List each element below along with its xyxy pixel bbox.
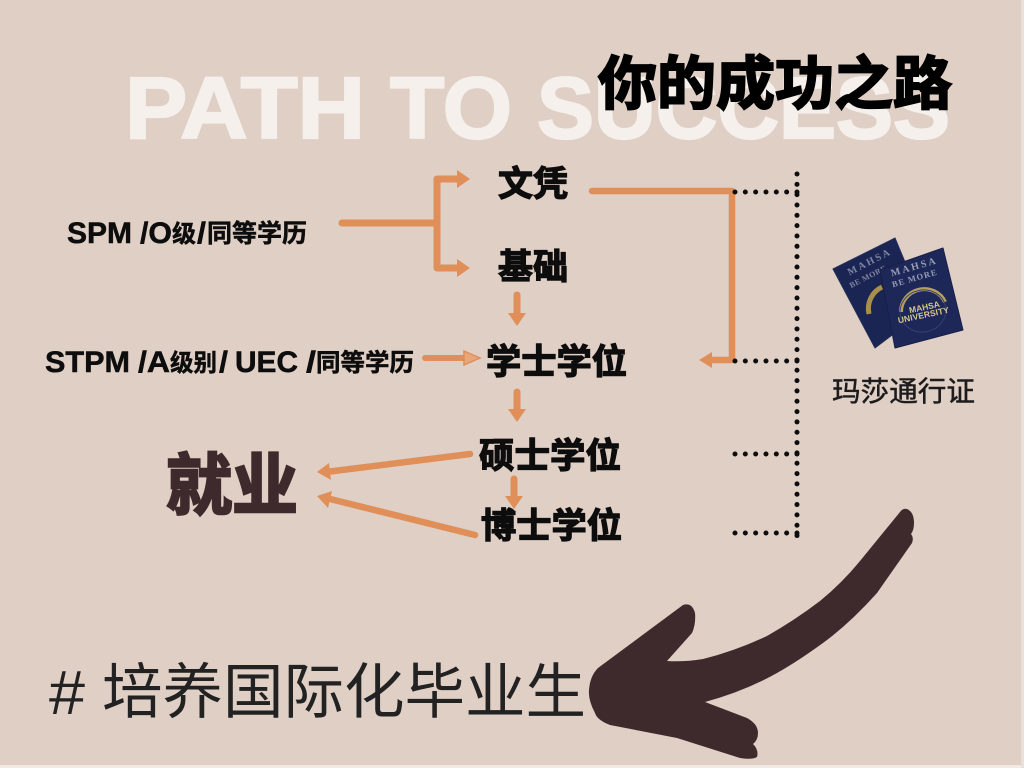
label: STPM qualification: / xyxy=(306,346,317,379)
label: SPM qualification: 级 xyxy=(172,221,196,248)
background title: PATH TO SUCCESS: PATH xyxy=(125,60,365,157)
label: SPM qualification: /O xyxy=(140,217,172,250)
node: 文凭: 文凭 xyxy=(498,165,568,204)
label: STPM qualification: 同等学历 xyxy=(316,349,414,377)
icon: MAHSA passports xyxy=(833,238,963,348)
background title: PATH TO SUCCESS: TO xyxy=(390,60,512,157)
icon: MAHSA passports: UNIVERSITY xyxy=(897,305,950,325)
label: STPM qualification: UEC xyxy=(235,346,298,379)
node: 博士学位: 博士学位 xyxy=(481,507,622,546)
node: 基础: 基础 xyxy=(498,248,568,287)
background title: PATH TO SUCCESS xyxy=(125,60,950,157)
icon: MAHSA passports: MAHSA xyxy=(908,299,941,315)
node: 就业: 就业 xyxy=(166,449,298,524)
label: SPM qualification: 同等学历 xyxy=(207,220,307,248)
icon: MAHSA passports: MAHSA xyxy=(890,256,938,279)
dotted connectors to passport xyxy=(735,174,797,537)
caption: 玛莎通行证: 玛莎通行证 xyxy=(832,376,975,407)
icon: MAHSA passports: MAHSA xyxy=(846,247,893,278)
node: 学士学位: 学士学位 xyxy=(486,343,627,382)
arrow: 学士学位 to 硕士学位 xyxy=(508,392,526,422)
label: SPM qualification xyxy=(67,217,307,250)
node: 硕士学位: 硕士学位 xyxy=(479,437,621,476)
label: STPM qualification xyxy=(45,346,414,379)
hashtag: 培养国际化毕业生: # xyxy=(49,659,86,728)
big brush arrow xyxy=(589,509,914,759)
label: STPM qualification: 级别 xyxy=(170,350,217,377)
icon: MAHSA passports: BE MORE xyxy=(891,267,938,289)
label: STPM qualification: STPM xyxy=(45,346,130,379)
arrow: STPM to 学士学位 xyxy=(425,351,480,365)
arrow: 基础 to 学士学位 xyxy=(508,295,526,326)
label: SPM qualification: / xyxy=(197,217,207,250)
arrow: 硕士学位 to 就业 xyxy=(317,454,470,480)
heading: 你的成功之路: 你的成功之路 xyxy=(598,52,952,117)
icon: MAHSA passports: BE MORE xyxy=(848,264,888,290)
arrow: 硕士学位 to 博士学位 xyxy=(505,479,523,509)
label: STPM qualification: /A xyxy=(138,346,170,379)
arrow: 文凭 to 学士学位 xyxy=(592,191,732,368)
arrow: 博士学位 to 就业 xyxy=(317,491,475,535)
hashtag: 培养国际化毕业生: 培养国际化毕业生 xyxy=(102,659,586,726)
arrow: SPM branching to 文凭 and 基础 xyxy=(342,170,470,277)
label: STPM qualification: / xyxy=(219,346,229,379)
label: SPM qualification: SPM xyxy=(67,217,132,250)
background title: PATH TO SUCCESS: SUCCESS xyxy=(537,60,950,157)
